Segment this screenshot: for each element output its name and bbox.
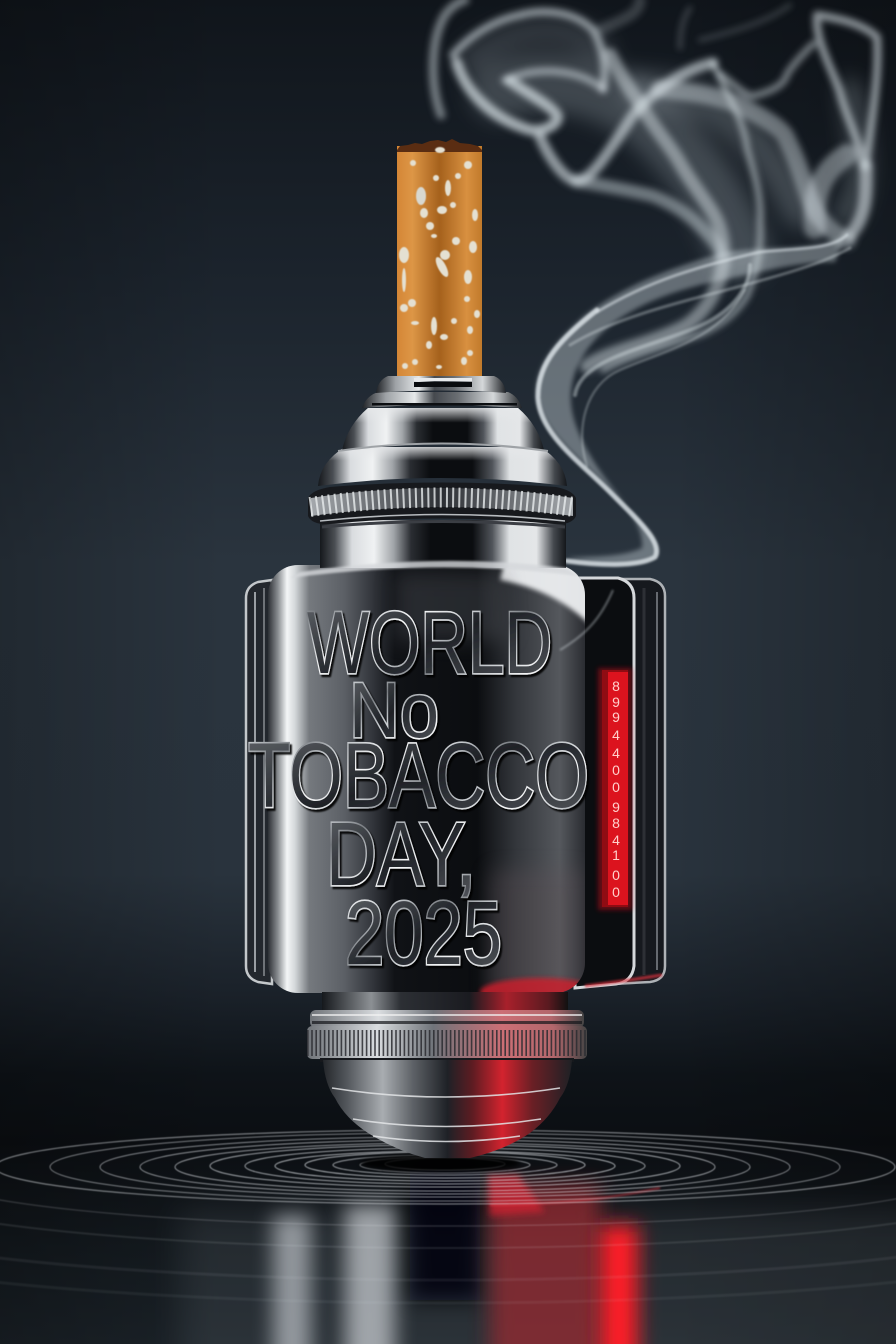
lower neck bbox=[322, 992, 568, 1014]
LED glow bbox=[598, 668, 632, 910]
LED digits: 9 bbox=[612, 694, 620, 710]
rear panel: left bbox=[246, 580, 272, 984]
LED digits: 9 bbox=[612, 799, 620, 815]
LED digits: 4 bbox=[612, 727, 620, 743]
body: clipped reflections bbox=[392, 567, 585, 992]
cigarette: ash flecks bbox=[399, 147, 480, 369]
LED digits: 9 bbox=[612, 709, 620, 725]
contact shadow bbox=[360, 1154, 520, 1172]
body: top right highlight bbox=[497, 567, 585, 625]
main chrome body bbox=[268, 560, 600, 1006]
upper knurled ring bbox=[308, 482, 576, 527]
LED digits: 4 bbox=[612, 745, 620, 761]
smoke: upper folds bbox=[433, 0, 878, 370]
red LED display bbox=[598, 668, 632, 910]
neck base ring bbox=[290, 561, 578, 578]
bowl: ridges bbox=[332, 1088, 560, 1142]
text: No: No bbox=[349, 666, 439, 754]
chrome dome bbox=[318, 376, 567, 486]
LED digits: 0 bbox=[612, 779, 620, 795]
dome: upper tier bbox=[342, 408, 544, 450]
floor ripple rings bbox=[0, 1130, 896, 1303]
LED digits bbox=[612, 678, 620, 900]
smoke wisp over the body bbox=[560, 590, 613, 650]
cigarette: tobacco column bbox=[397, 146, 482, 376]
LED digits: 4 bbox=[612, 832, 620, 848]
text: TOBACCO: TOBACCO bbox=[248, 725, 589, 827]
lettering: WORLD NO TOBACCO DAY, 2025 bbox=[248, 593, 589, 984]
LED digits: 0 bbox=[612, 884, 620, 900]
upper neck bbox=[320, 520, 566, 568]
smoke bbox=[433, 0, 878, 564]
dome: top collar bbox=[376, 376, 506, 393]
chrome bowl bbox=[323, 1060, 572, 1158]
body: lower right sheen bbox=[490, 870, 585, 1000]
LED digits: 0 bbox=[612, 762, 620, 778]
LED panel bbox=[602, 670, 628, 907]
dome: second collar bbox=[362, 392, 522, 408]
dome: lower tier bbox=[318, 447, 567, 486]
smoke: ribbon strands bbox=[538, 235, 850, 564]
smoke: lower filled ribbon bbox=[536, 232, 847, 564]
cigarette bbox=[397, 139, 482, 376]
body: red bottom tint bbox=[477, 975, 580, 992]
text: WORLD: WORLD bbox=[307, 593, 552, 692]
rear panel: right bbox=[575, 578, 665, 988]
lower knurled ring bbox=[307, 1010, 587, 1062]
cigarette: burnt tip bbox=[397, 139, 482, 152]
floor reflections bbox=[180, 1170, 896, 1344]
LED digits: 8 bbox=[612, 678, 620, 694]
LED digits: 0 bbox=[612, 867, 620, 883]
text: DAY,: DAY, bbox=[326, 805, 476, 905]
text: 2025: 2025 bbox=[345, 884, 502, 984]
smoke: soft haze bbox=[470, 30, 860, 250]
body: upper left sheen bbox=[395, 572, 510, 640]
LED digits: 1 bbox=[612, 847, 620, 863]
LED digits: 8 bbox=[612, 815, 620, 831]
